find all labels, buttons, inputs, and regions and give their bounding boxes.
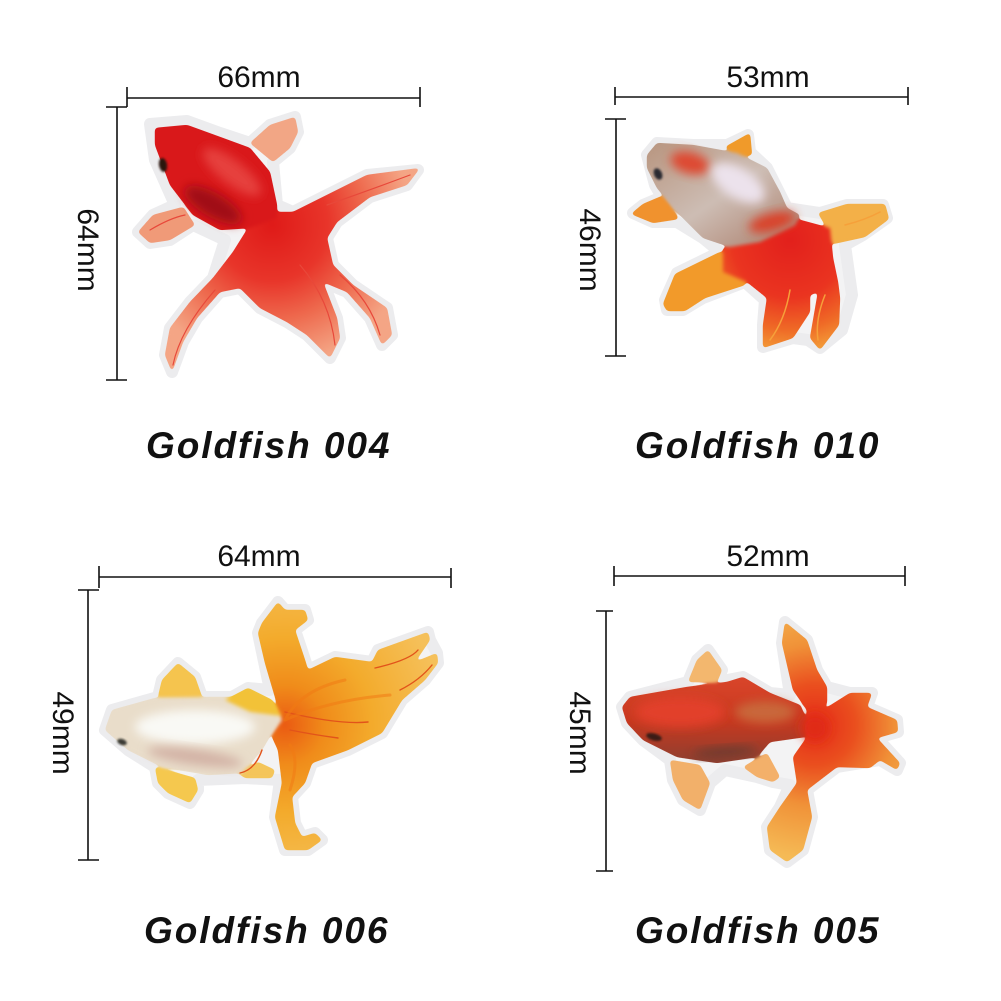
height dimension 49mm: 49mm <box>46 691 79 775</box>
goldfish 004 image <box>138 117 420 372</box>
panel: Goldfish 010 <box>573 61 908 466</box>
width dimension 64mm <box>99 540 451 588</box>
width dimension 64mm: 64mm <box>217 540 301 573</box>
width dimension 66mm <box>127 61 420 107</box>
goldfish 006 image <box>105 602 438 850</box>
panel: Goldfish 006 <box>46 540 451 951</box>
goldfish 010 image <box>631 133 889 350</box>
body shading <box>635 697 829 759</box>
body shading <box>116 650 432 790</box>
body shading <box>150 140 410 365</box>
height dimension 45mm: 45mm <box>563 691 596 775</box>
height dimension 46mm <box>573 119 626 356</box>
height dimension 64mm <box>71 107 127 380</box>
width dimension 53mm <box>615 61 908 105</box>
title Goldfish 004: Goldfish 004 <box>146 425 391 466</box>
height dimension 49mm <box>46 590 99 860</box>
height dimension 46mm: 46mm <box>573 208 606 292</box>
goldfish 005 image <box>622 622 900 862</box>
width dimension 52mm: 52mm <box>726 540 810 573</box>
title Goldfish 005: Goldfish 005 <box>635 910 880 951</box>
width dimension 66mm: 66mm <box>217 61 301 94</box>
panel: Goldfish 005 <box>563 540 905 951</box>
height dimension 45mm <box>563 611 613 871</box>
height dimension 64mm: 64mm <box>71 208 104 292</box>
panel: Goldfish 004 <box>71 61 420 466</box>
body shading <box>652 147 880 340</box>
title Goldfish 006: Goldfish 006 <box>144 910 389 951</box>
width dimension 52mm <box>614 540 905 586</box>
title Goldfish 010: Goldfish 010 <box>635 425 880 466</box>
width dimension 53mm: 53mm <box>726 61 810 94</box>
